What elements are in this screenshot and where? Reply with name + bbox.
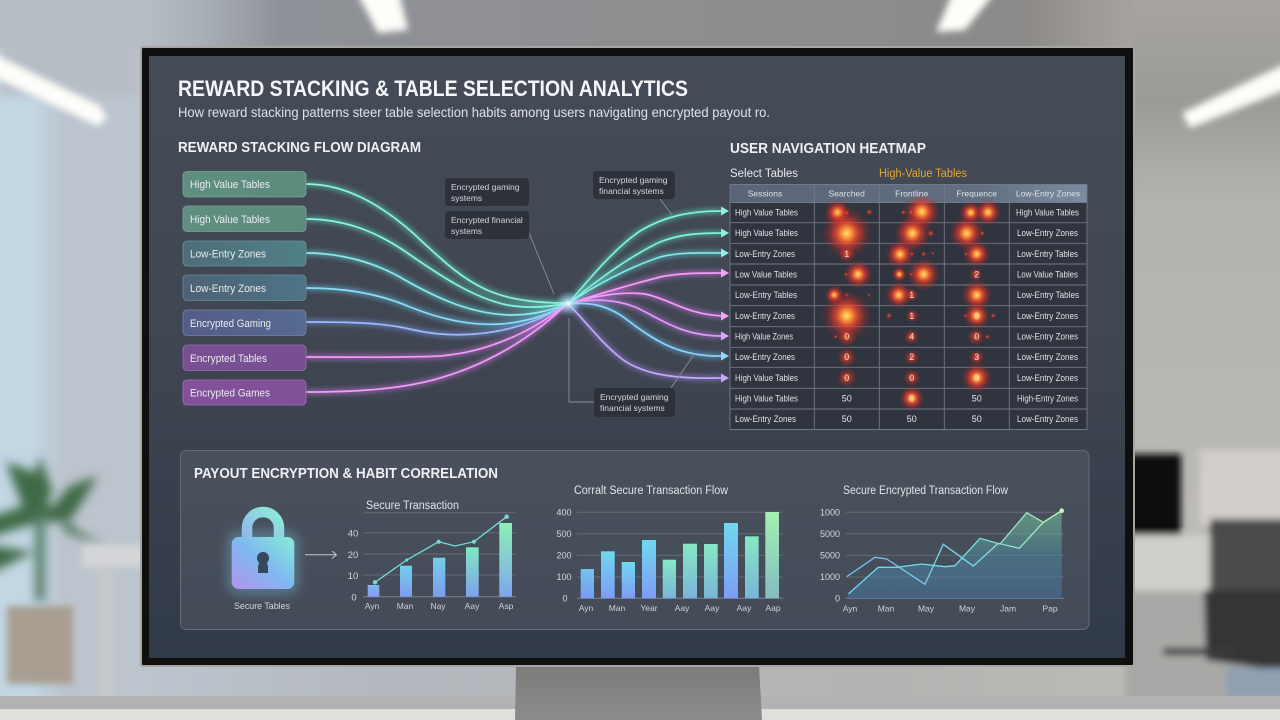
heatmap header text: Low-Entry Zones xyxy=(1016,188,1080,198)
heatmap row labels: Low-Entry Zones xyxy=(1017,311,1079,321)
heatmap values: 0 xyxy=(909,394,914,404)
chart: encrypted transaction flow: 1000 xyxy=(820,572,840,582)
heatmap row labels: Low-Entry Zones xyxy=(1017,228,1079,238)
heat spots xyxy=(821,193,1002,411)
heatmap values: 0 xyxy=(844,373,849,383)
chart: secure transaction flow: 500 xyxy=(556,529,572,539)
callout: encrypted financial systems xyxy=(445,211,529,239)
chart: encrypted transaction flow: May xyxy=(959,604,976,614)
side table xyxy=(82,545,152,700)
chart: encrypted transaction flow: Jam xyxy=(1000,604,1016,614)
heatmap header text: Sessions xyxy=(748,188,782,198)
callout: encrypted gaming systems: systems xyxy=(451,193,482,203)
chart: secure transaction: Nay xyxy=(430,601,446,611)
heatmap row labels: High Value Zones xyxy=(735,332,793,342)
heatmap values: 2 xyxy=(974,270,979,280)
leader lines xyxy=(529,199,695,402)
chart: secure transaction: Asp xyxy=(499,601,514,611)
left tier boxes: High Value Tables xyxy=(190,179,270,191)
chart: secure transaction flow: Year xyxy=(640,603,658,613)
callout: encrypted financial systems: systems xyxy=(451,226,482,236)
chart: secure transaction: Secure Transaction xyxy=(366,500,459,512)
heatmap header text xyxy=(748,188,1080,198)
chart: secure transaction flow: Ayn xyxy=(579,603,594,613)
chart: secure transaction flow: 0 xyxy=(562,594,568,604)
subtitle: How reward stacking patterns steer table selection habits among users navigating encrypted payout ro. xyxy=(178,104,770,120)
callout: gaming financial systems top: Encrypted gaming xyxy=(599,175,668,185)
flow diagram xyxy=(183,171,729,417)
chart: encrypted transaction flow: Pap xyxy=(1042,604,1058,614)
chart: secure transaction flow: 100 xyxy=(556,572,572,582)
chart: encrypted transaction flow: 1000 xyxy=(820,508,840,518)
icon: padlock xyxy=(226,512,300,596)
callout: encrypted gaming systems: Encrypted gaming xyxy=(451,182,520,192)
heatmap row labels: High Value Tables xyxy=(735,394,799,404)
heatmap header text: Searched xyxy=(829,188,865,198)
callout: encrypted financial systems: Encrypted financial xyxy=(451,215,523,225)
chart: secure transaction flow: Aay xyxy=(737,603,752,613)
heatmap highlight label: High-Value Tables xyxy=(879,168,967,180)
chart: encrypted transaction flow: Secure Encrypted Transaction Flow xyxy=(843,485,1009,497)
heatmap row labels: Low Value Tables xyxy=(1017,270,1079,280)
heatmap row labels: High Value Tables xyxy=(735,208,799,218)
flow lines xyxy=(306,184,722,392)
heatmap table xyxy=(730,184,1087,430)
heatmap values: 1 xyxy=(909,290,914,300)
left tier boxes xyxy=(183,172,306,405)
callout: gaming financial systems bottom: Encrypted gaming xyxy=(600,392,669,402)
heatmap row labels: Low-Entry Tables xyxy=(735,290,798,300)
heatmap values: 1 xyxy=(844,249,849,259)
flow line glow xyxy=(306,184,722,392)
heatmap row labels: Low-Entry Tables xyxy=(1017,249,1079,259)
chart: secure transaction flow: Aay xyxy=(705,603,720,613)
left tier boxes: Low-Entry Zones xyxy=(190,283,266,295)
heading: flow diagram: REWARD STACKING FLOW DIAGRAM xyxy=(178,140,421,156)
chart: encrypted transaction flow xyxy=(820,485,1064,614)
heatmap row labels: Low-Entry Zones xyxy=(735,352,796,362)
chart: secure transaction: Ayn xyxy=(365,601,380,611)
chart: secure transaction flow: Man xyxy=(609,603,626,613)
callout: encrypted gaming systems xyxy=(445,178,529,206)
heatmap row labels: Low-Entry Zones xyxy=(1017,352,1079,362)
callout: gaming financial systems top xyxy=(593,171,675,199)
chart: encrypted transaction flow: 5000 xyxy=(820,529,840,539)
heatmap row labels: Low-Entry Zones xyxy=(1017,332,1079,342)
heatmap row labels: Low-Entry Zones xyxy=(1017,373,1079,383)
heatmap values: 2 xyxy=(909,352,914,362)
heatmap row labels: High Value Tables xyxy=(735,228,799,238)
heatmap values xyxy=(842,249,982,424)
callout: gaming financial systems top: financial systems xyxy=(599,186,664,196)
chart: secure transaction flow: Corralt Secure Transaction Flow xyxy=(574,485,729,497)
panel heading: PAYOUT ENCRYPTION & HABIT CORRELATION xyxy=(194,466,498,482)
chart: encrypted transaction flow: May xyxy=(918,604,935,614)
chart: secure transaction flow: 200 xyxy=(556,550,572,560)
chart: secure transaction: 20 xyxy=(348,550,358,561)
panel: payout encryption xyxy=(180,450,1089,630)
heatmap row labels: High Value Tables xyxy=(1016,208,1080,218)
left tier boxes: Encrypted Tables xyxy=(190,353,267,365)
heatmap row labels: Low-Entry Zones xyxy=(735,311,796,321)
flow hub xyxy=(555,290,581,316)
chart: encrypted transaction flow: 5000 xyxy=(820,550,840,560)
left tier boxes: Encrypted Games xyxy=(190,388,270,400)
chart: secure transaction flow xyxy=(556,485,783,613)
chart: secure transaction: Man xyxy=(397,601,414,611)
heatmap values: 3 xyxy=(974,352,979,362)
chart: secure transaction: 40 xyxy=(348,528,358,540)
chart: secure transaction flow: Aap xyxy=(765,603,781,613)
ceiling lights xyxy=(0,0,1280,128)
left tier boxes: High Value Tables xyxy=(190,214,270,226)
callout: gaming financial systems bottom xyxy=(594,388,675,417)
monitor screen xyxy=(149,56,1125,658)
chart: secure transaction flow: 400 xyxy=(556,508,572,518)
monitor bezel xyxy=(141,47,1134,666)
heatmap values: 0 xyxy=(974,332,979,342)
heatmap values: 4 xyxy=(909,332,914,342)
title: REWARD STACKING & TABLE SELECTION ANALYTICS xyxy=(178,76,688,101)
chart: secure transaction: 0 xyxy=(351,592,357,604)
heatmap values: 0 xyxy=(844,332,849,342)
chart: encrypted transaction flow: 0 xyxy=(835,594,840,604)
chart: secure transaction xyxy=(348,500,516,611)
arrow: lock to chart xyxy=(305,551,336,558)
heatmap row labels: High-Entry Zones xyxy=(1017,394,1079,404)
heatmap filter label: Select Tables xyxy=(730,168,798,180)
heatmap values: 0 xyxy=(974,373,979,383)
left tier boxes: Low-Entry Zones xyxy=(190,248,266,260)
chart: secure transaction: 10 xyxy=(348,571,358,582)
heatmap row labels: High Value Tables xyxy=(735,373,799,383)
heatmap row labels: Low-Entry Tables xyxy=(1017,290,1080,300)
arrow heads xyxy=(721,206,729,382)
lock label: Secure Tables xyxy=(234,601,290,612)
callout: gaming financial systems bottom: financial systems xyxy=(600,403,665,413)
heatmap values: 0 xyxy=(974,311,979,321)
heatmap values: 50 xyxy=(842,414,852,424)
heatmap values: 1 xyxy=(909,311,914,321)
heatmap row labels: Low-Entry Zones xyxy=(735,414,797,424)
heading: heatmap: USER NAVIGATION HEATMAP xyxy=(730,141,926,157)
heatmap values: 0 xyxy=(844,352,849,362)
heatmap values: 50 xyxy=(907,414,917,424)
chart: encrypted transaction flow: Ayn xyxy=(843,604,858,614)
monitor stand xyxy=(515,665,762,720)
heatmap row labels: Low-Entry Zones xyxy=(1017,414,1079,424)
heatmap row labels: Low Value Tables xyxy=(735,270,798,280)
heatmap header text: Frontline xyxy=(895,188,929,198)
plant and pot xyxy=(0,456,104,684)
heatmap values: 50 xyxy=(842,394,852,404)
heatmap values: 0 xyxy=(909,373,914,383)
heatmap row labels: Low-Entry Zones xyxy=(735,249,796,259)
chart: encrypted transaction flow: Man xyxy=(878,604,895,614)
chart: secure transaction flow: Aay xyxy=(675,603,690,613)
background desk monitor and chair xyxy=(1125,450,1280,702)
heatmap values: 50 xyxy=(972,394,982,404)
heatmap row labels xyxy=(735,208,1080,424)
chart: secure transaction: Aay xyxy=(465,601,480,611)
heatmap values: 50 xyxy=(972,414,982,424)
left tier boxes: Encrypted Gaming xyxy=(190,318,271,330)
heatmap header text: Frequence xyxy=(956,188,997,198)
